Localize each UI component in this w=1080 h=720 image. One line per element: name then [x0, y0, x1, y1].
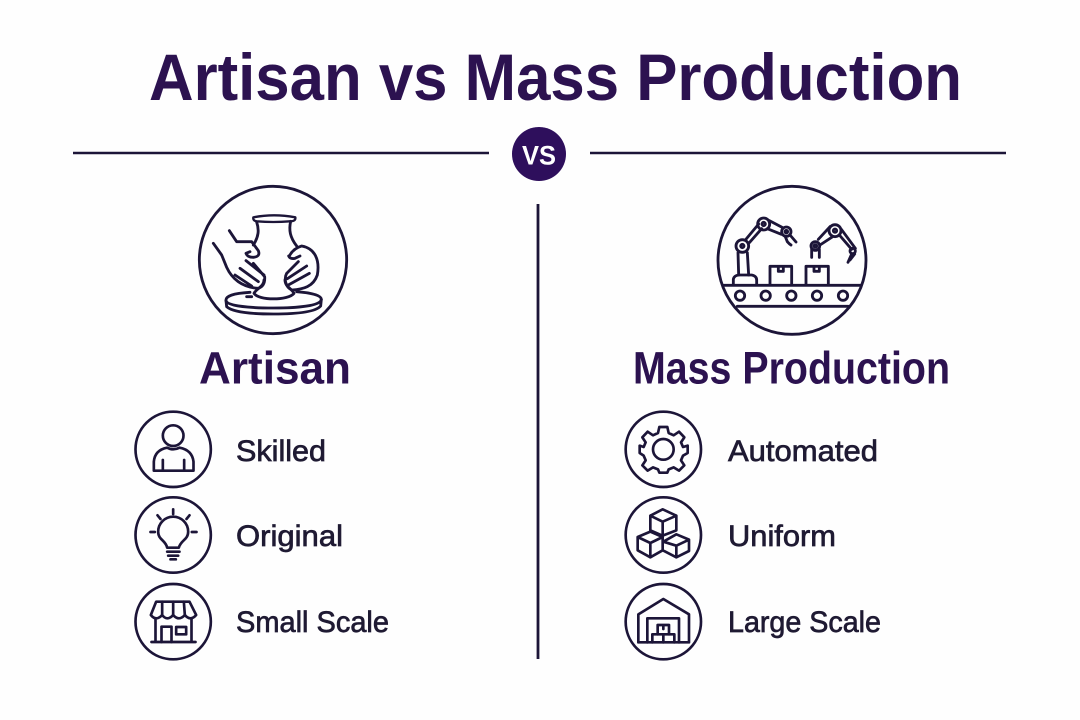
icon: light bulb	[135, 497, 211, 573]
item: original	[135, 497, 343, 573]
title: Artisan vs Mass Production	[149, 40, 962, 114]
heading: mass production: Mass Production	[633, 342, 950, 394]
item: large scale	[626, 584, 881, 659]
vs badge: VS	[522, 140, 556, 170]
item: small scale: Small Scale	[236, 606, 389, 639]
icon: gear	[626, 412, 701, 487]
icon: robot arms over conveyor	[718, 186, 866, 334]
item: skilled: Skilled	[236, 435, 326, 468]
item: skilled	[135, 412, 326, 487]
divider left	[73, 152, 489, 154]
icon: hands shaping pottery on wheel	[199, 186, 347, 334]
item: original: Original	[236, 520, 343, 553]
divider right	[590, 152, 1006, 154]
icon: storefront	[135, 584, 211, 659]
item: uniform: Uniform	[728, 520, 836, 553]
icon: warehouse	[626, 584, 701, 659]
item: automated	[626, 412, 878, 487]
icon: stacked cubes	[626, 497, 701, 573]
item: large scale: Large Scale	[728, 606, 881, 639]
panel: mass production	[626, 186, 950, 659]
item: small scale	[135, 584, 389, 659]
vs badge	[512, 127, 566, 181]
heading: artisan: Artisan	[199, 342, 351, 394]
center vertical divider	[537, 204, 539, 659]
item: automated: Automated	[728, 435, 878, 468]
icon: person	[135, 412, 211, 487]
panel: artisan	[135, 186, 389, 659]
item: uniform	[626, 497, 836, 573]
